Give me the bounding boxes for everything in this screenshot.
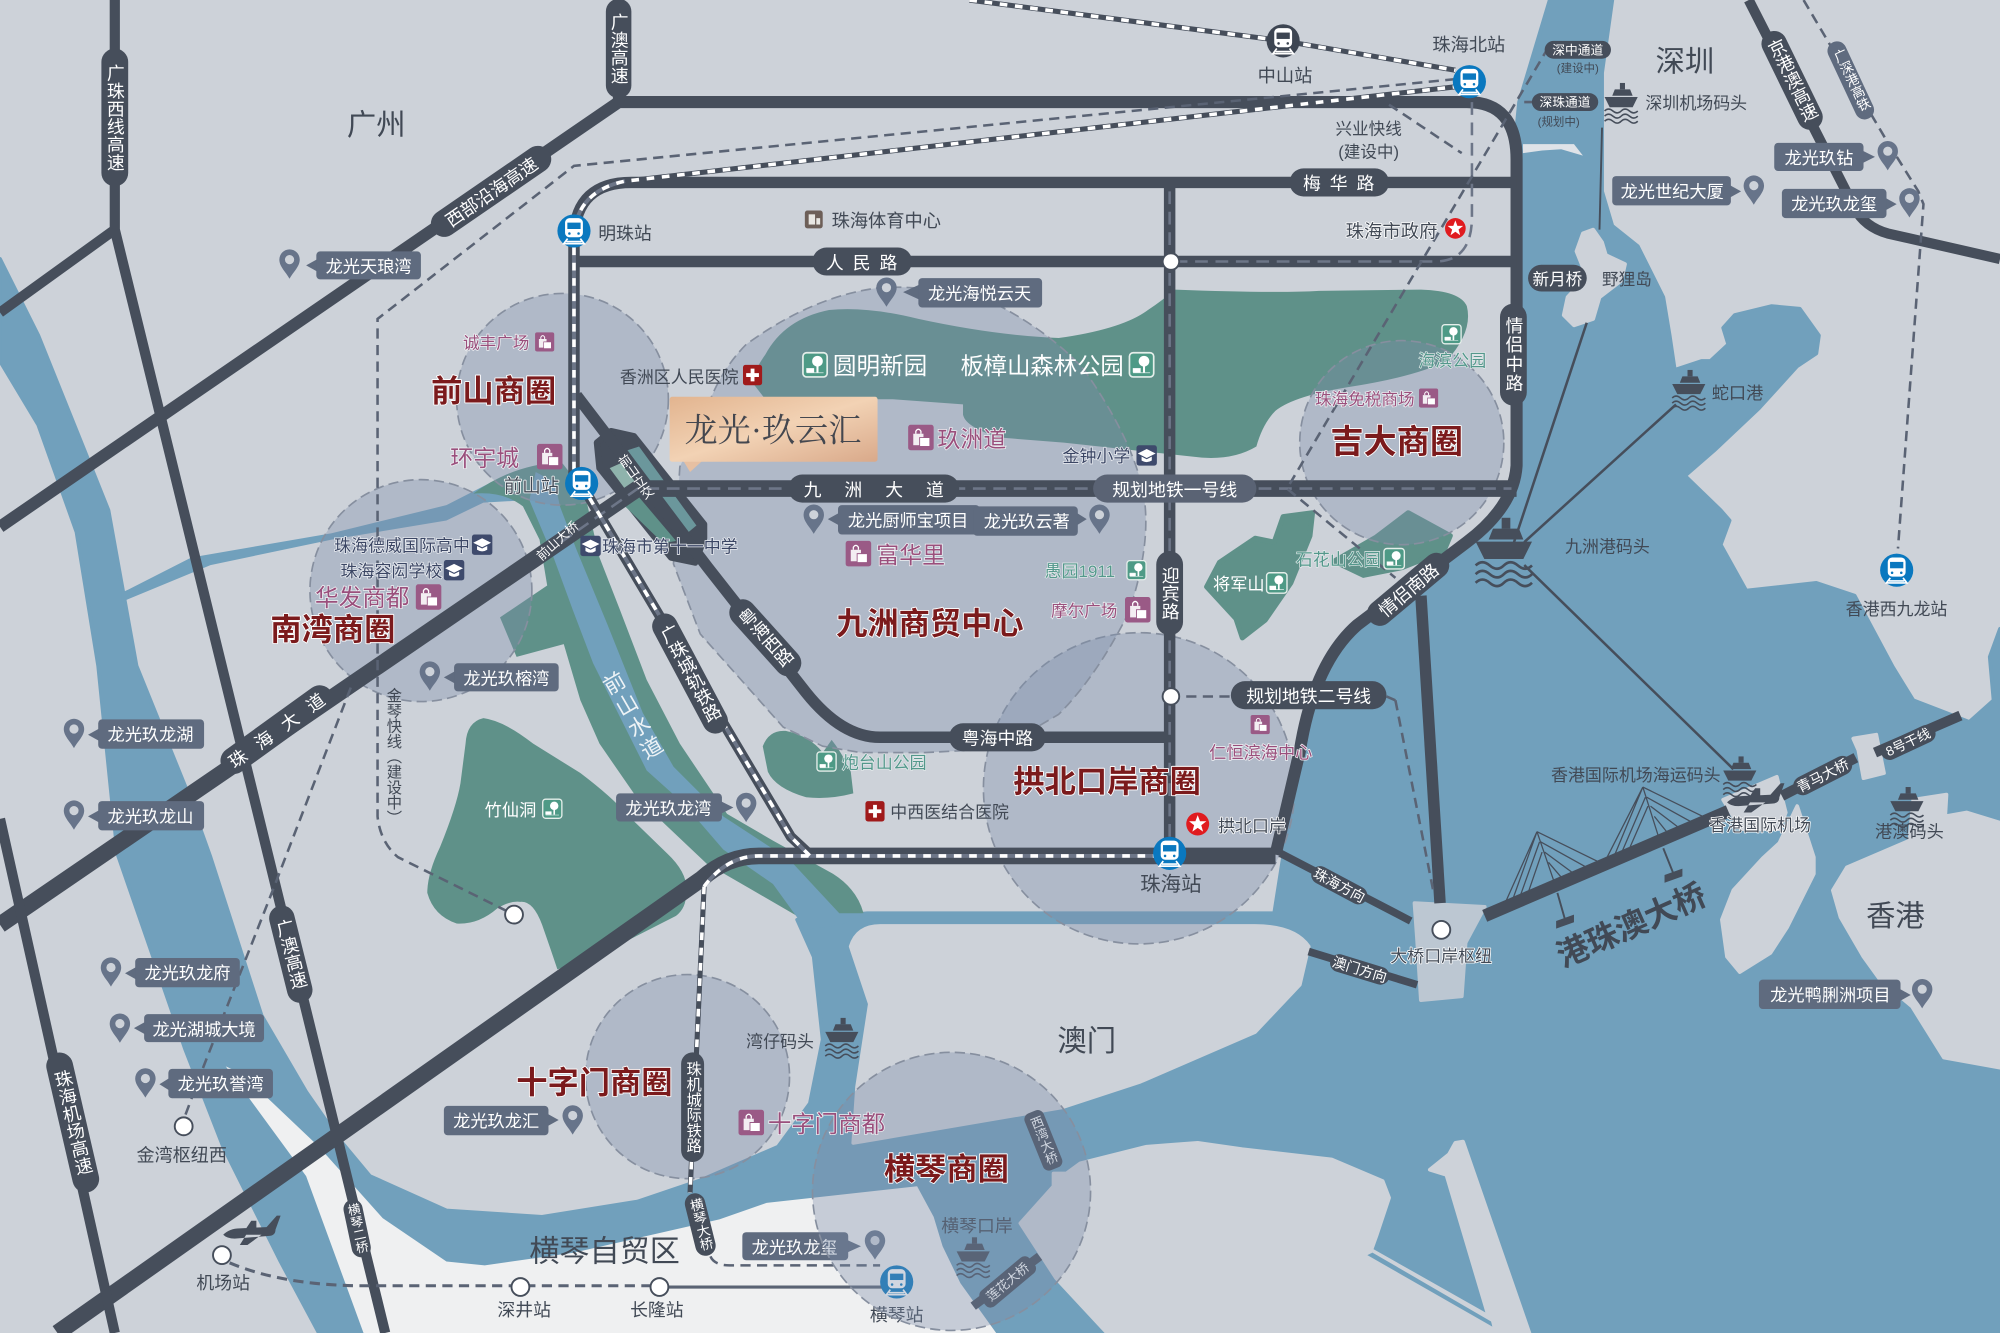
tag: Jiulong Xi south: 龙光玖龙玺 [752, 1237, 838, 1257]
pill: Zhuhai direction: 珠海方向 [1311, 865, 1368, 905]
tag: Jiulong Bay [616, 793, 756, 822]
airport metro dashed [230, 1263, 659, 1286]
green park: Yuanming and Banzhangshan [753, 290, 1468, 458]
railway dark base [625, 0, 1455, 1193]
place name titles: 广州 [347, 109, 406, 142]
station and port labels: 深井站 [497, 1300, 551, 1320]
pill: Zhuji rail: 珠机城际铁路 [684, 1061, 702, 1153]
tag: Jiurong Bay [420, 661, 559, 691]
shopping labels: 摩尔广场 [1051, 602, 1117, 621]
bridge anchors [1556, 869, 1682, 929]
place name titles: 深圳 [1656, 45, 1714, 78]
delta ring expressway [57, 856, 1276, 1333]
shopping labels: 环宇城 [450, 445, 519, 471]
shopping labels: 十字门商都 [768, 1111, 885, 1137]
circle: Gongbei [983, 633, 1295, 944]
station and port labels: 深圳机场码头 [1645, 94, 1747, 113]
Hengqin station label: 横琴站 [870, 1305, 924, 1325]
park labels: 炮台山公园 [842, 753, 927, 772]
label: Qianshan bridge: 前山大桥 [533, 518, 582, 563]
Lantau island [1722, 806, 1814, 972]
pill: Guangao north [606, 0, 631, 98]
railway white dashes [574, 87, 1455, 485]
pill: Lianhua bridge: 莲花大桥 [983, 1260, 1032, 1304]
Qianshan interchange [597, 431, 704, 563]
pill: Xinyue bridge [1528, 265, 1587, 292]
pill: airport expressway: 珠海机场高速 [51, 1068, 94, 1177]
Jinqin express dashed [378, 79, 1455, 915]
school labels [334, 445, 1157, 581]
pill: Yuehai middle: 粤海中路 [962, 729, 1033, 749]
tag: Jiurong Bay: 龙光玖榕湾 [463, 669, 549, 689]
pill: Shenzhong passage: 深中通道 [1552, 42, 1604, 57]
pill: Guangao south: 广澳高速 [272, 917, 309, 991]
park labels [485, 325, 1486, 820]
school labels: 珠海市第十一中学 [602, 538, 738, 557]
pill: Yingbin road [1156, 551, 1183, 635]
interchange inner green [610, 463, 638, 492]
railway grey centre on roads [574, 181, 1170, 887]
station and port labels: 兴业快线 [1335, 119, 1402, 138]
Xingye express dashed [1389, 105, 1462, 153]
Yuehai road [577, 395, 1170, 737]
Lianhua bridge [973, 1256, 1040, 1306]
pill: Beijing-HK-Macau: 京港澳高速 [1763, 36, 1821, 125]
shopping labels: 华发商都 [315, 585, 409, 611]
interchange inner strip [628, 446, 696, 532]
pill: Meihua road: 梅华路 [1303, 174, 1383, 194]
Shenzhen river line [1599, 128, 1602, 230]
icon: sports centre [805, 211, 823, 228]
shopping labels: 诚丰广场 [463, 334, 529, 353]
hospitals and landmarks: 拱北口岸 [1218, 817, 1286, 836]
pill: Qinglv south [1362, 548, 1454, 631]
circle: Hengqin [812, 1052, 1091, 1330]
pill: Guangzhu west [101, 49, 128, 186]
business district titles: 九洲商贸中心 [836, 606, 1024, 641]
station and port labels: 港澳码头 [1875, 822, 1944, 842]
station and port labels: (规划中) [1538, 114, 1580, 128]
ship icons [825, 83, 1923, 1058]
pill: Yuehai west: 粤海西路 [734, 604, 797, 671]
pill: airport expressway [44, 1050, 102, 1195]
station and port labels: 野狸岛 [1602, 270, 1652, 289]
Shenzhen-Zhongshan dashed [1287, 47, 1548, 893]
pill: Guangshen-HK rail: 广深港高铁 [1830, 46, 1873, 114]
park labels: 愚园1911 [1045, 562, 1115, 581]
tag: Ap Lei Chau: 龙光鸭脷洲项目 [1770, 985, 1891, 1005]
station: Zhuhai [1153, 837, 1186, 870]
white nodes [175, 253, 1450, 1296]
station: Zhongshan [1267, 24, 1300, 57]
Hong Kong airport island [1723, 777, 1786, 829]
green: Shihuashan [1334, 513, 1450, 575]
station and port labels: 珠海北站 [1432, 34, 1505, 55]
station and port labels: 珠海站 [1140, 873, 1201, 896]
tag: Jiulong Hui: 龙光玖龙汇 [453, 1111, 539, 1131]
station and port labels: 大桥口岸枢纽 [1390, 947, 1492, 966]
station and port labels: (建设中) [1557, 61, 1599, 75]
station and port labels: 湾仔码头 [746, 1033, 814, 1052]
business district titles: 南湾商圈 [270, 612, 395, 648]
tag: Jiuzuan: 龙光玖钻 [1784, 148, 1853, 168]
pill: Yuehai west [724, 594, 807, 682]
Hengqin station icon [880, 1265, 913, 1299]
bridge hub island [1415, 903, 1485, 1000]
tag: Ap Lei Chau [1759, 979, 1932, 1009]
station and port labels: 香港西九龙站 [1846, 600, 1947, 619]
station: Mingzhu [557, 214, 591, 247]
Hengqin port ship icon [957, 1237, 990, 1277]
station and port labels: 中山站 [1258, 65, 1312, 86]
school labels: 珠海德威国际高中 [334, 536, 470, 555]
pill: metro line 1: 规划地铁一号线 [1112, 480, 1237, 500]
Beijing-HK-Macau expressway [1749, 0, 2000, 259]
HZMB deck [1485, 811, 1728, 916]
pill: route 8: 8号干线 [1883, 726, 1933, 759]
Hong Kong land [1833, 795, 2000, 1068]
pill: Yuehai middle [949, 723, 1046, 751]
business district titles: 拱北口岸商圈 [1013, 764, 1201, 799]
airport expressway [0, 819, 115, 1333]
pill: Guangao north: 广澳高速 [609, 13, 629, 84]
station: Zhuhai North [1453, 65, 1486, 98]
pill: Renmin road: 人民路 [826, 253, 906, 273]
business district titles: 吉大商圈 [1330, 424, 1463, 461]
tag: Jiulong Hui [444, 1105, 583, 1135]
northwest connector dashed [185, 688, 351, 1116]
station and port labels: 前山站 [504, 476, 559, 497]
pill: Shenzhong passage [1545, 41, 1611, 59]
station and port labels: 香港国际机场海运码头 [1551, 766, 1721, 785]
business district titles [270, 374, 1463, 1187]
place name titles [347, 45, 1925, 1268]
shopping labels: 玖洲道 [938, 426, 1006, 452]
circle: Qianshan [457, 293, 668, 505]
pill: Renmin road [812, 247, 912, 276]
tag: Jiuyunzhu [973, 505, 1110, 536]
pill: Yingbin road: 迎宾路 [1160, 566, 1180, 620]
tag: Jiuyu Bay [135, 1068, 273, 1098]
label: Qianshan interchange: 前山立交 [614, 451, 656, 503]
metro 2 dashed [1170, 696, 1395, 700]
tag: Lake City [110, 1013, 264, 1043]
interchange lower green [620, 491, 676, 543]
hospitals and landmarks: 珠海体育中心 [832, 210, 941, 231]
tag: Haiyue Yuntian [876, 277, 1042, 307]
Zhuhai and Macau directions [1281, 853, 1417, 985]
business district titles: 前山商圈 [431, 374, 556, 409]
circle: Jida [1300, 341, 1504, 545]
Hengqin metro solid line [659, 1286, 893, 1288]
Hengqin free trade zone land [226, 1066, 996, 1333]
tag: Jiulong Mountain: 龙光玖龙山 [108, 806, 194, 826]
tag: Jiulong Xi north: 龙光玖龙玺 [1791, 194, 1877, 214]
tag: Jiuzuan [1774, 141, 1898, 171]
Zhuhai boulevard and Jiuzhou avenue [0, 489, 1517, 925]
Qianshan channel green banks [473, 462, 864, 920]
pill: Jiuzhou avenue: 九洲大道 [804, 480, 967, 500]
Guangao north [614, 0, 623, 102]
plane icons [223, 783, 1784, 1245]
hospitals and landmarks: 珠海市政府 [1346, 220, 1437, 241]
intercity railway base [582, 485, 810, 855]
station and port labels: 明珠站 [598, 223, 652, 243]
place name titles: 香港 [1866, 900, 1925, 933]
pill: coastal expressway: 西部沿海高速 [442, 154, 542, 231]
tag: Jiulong Xi south [742, 1230, 885, 1260]
project tags [64, 141, 1932, 1260]
tag: Jiulong Xi north [1782, 188, 1920, 218]
tag: Lake City: 龙光湖城大境 [152, 1019, 256, 1039]
Yingbin road [1165, 182, 1174, 856]
pill: Xiwan bridge [1022, 1108, 1064, 1173]
green: Jiangjunshan [1207, 513, 1312, 638]
tag: Jiulong Mountain [64, 800, 204, 830]
pill: Guangao south [266, 903, 315, 1005]
pill: metro line 2: 规划地铁二号线 [1246, 686, 1371, 706]
shopping labels: 仁恒滨海中心 [1209, 743, 1312, 763]
green: Zhuxiandong [427, 718, 686, 969]
Hengqin east land [1020, 1142, 1529, 1333]
hospitals and landmarks [620, 210, 1466, 836]
pill: Zhuji rail [681, 1052, 704, 1162]
shopping labels: 珠海免税商场 [1315, 390, 1415, 409]
Renmin road [574, 257, 1517, 266]
pill: Qinglv middle [1500, 304, 1527, 406]
ferry lines [1514, 323, 1733, 769]
park labels: 将军山 [1213, 574, 1265, 594]
tag: Chef project [804, 505, 980, 534]
pill: Hengqin bridge: 横琴大桥 [686, 1196, 715, 1253]
Qianshan channel water [529, 472, 864, 930]
pier channel [1367, 1253, 1492, 1327]
hospitals and landmarks: 香洲区人民医院 [620, 368, 739, 387]
pill: metro line 1 [1093, 475, 1256, 503]
pill: Guangshen-HK rail [1824, 38, 1877, 123]
station and port labels: 九洲港码头 [1565, 538, 1650, 557]
Qianshan channel name: 前山水道 [597, 668, 668, 766]
project callout: Longguang Jiuyunhui: 龙光·玖云汇 [685, 413, 861, 450]
tag: Jiulong Bay: 龙光玖龙湾 [625, 799, 711, 819]
Macau land [851, 926, 1309, 1143]
pill: Hengqin bridge [683, 1191, 718, 1258]
pill: Tsing Ma bridge: 青马大桥 [1794, 756, 1851, 795]
pill: Guangzhu west: 广珠西线高速 [105, 64, 125, 171]
business circles [310, 287, 1504, 1179]
station and port labels: 蛇口港 [1712, 383, 1763, 403]
station and port labels: (建设中) [1338, 142, 1399, 161]
place name titles: 横琴自贸区 [529, 1235, 680, 1268]
expressway west [0, 0, 385, 1333]
blob: Jiuzhou trade centre [673, 287, 1146, 753]
pill: Shenzhu passage [1532, 93, 1598, 111]
tag: Tianlang Bay [279, 249, 421, 279]
shopping labels: 富华里 [876, 542, 945, 568]
Hengqin dashed [710, 1256, 880, 1265]
tag: Jiuyunzhu: 龙光玖云著 [984, 512, 1070, 532]
station and port labels: 金湾枢纽西 [136, 1146, 227, 1166]
Shenzhen pier [1523, 144, 1583, 156]
pill: intercity rail [648, 609, 732, 738]
park labels: 圆明新园 [833, 353, 927, 379]
tag: Jiulong Mansion: 龙光玖龙府 [144, 963, 231, 983]
tag: Jiulong Mansion [101, 957, 240, 987]
project callout: Longguang Jiuyunhui [670, 397, 878, 472]
school labels: 珠海容闳学校 [341, 562, 442, 581]
pill: Qinglv south: 情侣南路 [1375, 560, 1443, 621]
hospitals and landmarks: 中西医结合医院 [890, 803, 1009, 822]
shopping labels [315, 332, 1438, 1137]
tag: Jiulong Lake: 龙光玖龙湖 [108, 725, 194, 745]
pill: Lianhua bridge [977, 1254, 1039, 1310]
tag: Haiyue Yuntian: 龙光海悦云天 [928, 283, 1031, 303]
Meihua road [574, 182, 1517, 485]
park labels: 石花山公园 [1296, 550, 1381, 569]
circle: Shizimen [585, 975, 790, 1179]
Guangshen railway dashed [1804, 0, 1923, 549]
station: HK West Kowloon [1880, 554, 1913, 587]
pill: Meihua road [1290, 168, 1389, 196]
Zhuhai railway white dashes [690, 856, 1170, 1193]
tag: Chef project: 龙光厨师宝项目 [848, 510, 968, 530]
tag: Century tower: 龙光世纪大厦 [1621, 181, 1724, 201]
Tsing Ma islet [1853, 735, 1884, 778]
green: Paotaishan [763, 731, 853, 798]
business district titles: 横琴商圈 [884, 1152, 1009, 1187]
circle: Nanwan [310, 480, 532, 702]
tag: Jiuyu Bay: 龙光玖誉湾 [178, 1074, 264, 1094]
station: Qianshan [565, 467, 598, 500]
Tsing Ma and route 8 [1782, 716, 1960, 796]
HZMB cable stay bridges [1505, 787, 1708, 920]
park labels: 板樟山森林公园 [960, 353, 1124, 379]
HZMB title: 港珠澳大桥 [1551, 877, 1712, 974]
pill: metro line 2 [1231, 681, 1386, 709]
pill: Xinyue bridge: 新月桥 [1533, 270, 1583, 289]
label: Jinqin express: 金琴快线（建设中） [384, 688, 402, 825]
school labels: 金钟小学 [1062, 447, 1130, 466]
pill: intercity rail: 广珠城轨铁路 [656, 621, 724, 725]
station and port labels: 香港国际机场 [1709, 816, 1811, 835]
pill: Zhuhai boulevard: 珠海大道 [225, 682, 340, 772]
link to bridge hub [1421, 596, 1440, 903]
intercity railway white dashes [582, 485, 810, 856]
pill: Jiuzhou avenue [788, 475, 967, 503]
pill: Shenzhu passage: 深珠通道 [1540, 95, 1591, 110]
Hengqin port label: 横琴口岸 [941, 1216, 1013, 1236]
Yeli island [1564, 230, 1625, 325]
pill: Beijing-HK-Macau [1757, 27, 1827, 134]
tag: Century tower [1612, 175, 1764, 205]
pill: coastal expressway [426, 141, 556, 242]
Zhongshan railway white dashes [969, 0, 1455, 70]
pill: Qinglv middle: 情侣中路 [1503, 316, 1523, 393]
pill: Xiwan bridge: 西湾大桥 [1027, 1114, 1060, 1168]
tag: Tianlang Bay: 龙光天琅湾 [326, 257, 412, 277]
place name titles: 澳门 [1057, 1025, 1116, 1058]
station and port labels: 长隆站 [630, 1300, 684, 1320]
park labels: 竹仙洞 [485, 800, 536, 820]
park labels: 海滨公园 [1418, 352, 1486, 371]
planned metro dashes on roads [561, 102, 1511, 842]
tag: Jiulong Lake [64, 719, 204, 749]
pill: route 8 [1878, 722, 1939, 763]
business district titles: 十字门商圈 [516, 1065, 673, 1100]
station and port labels: 机场站 [196, 1273, 250, 1293]
coastal expressway and ring road [0, 102, 1517, 855]
pill: Hengqin second bridge: 横琴二桥 [345, 1202, 370, 1256]
pill: Macau direction: 澳门方向 [1331, 954, 1389, 985]
